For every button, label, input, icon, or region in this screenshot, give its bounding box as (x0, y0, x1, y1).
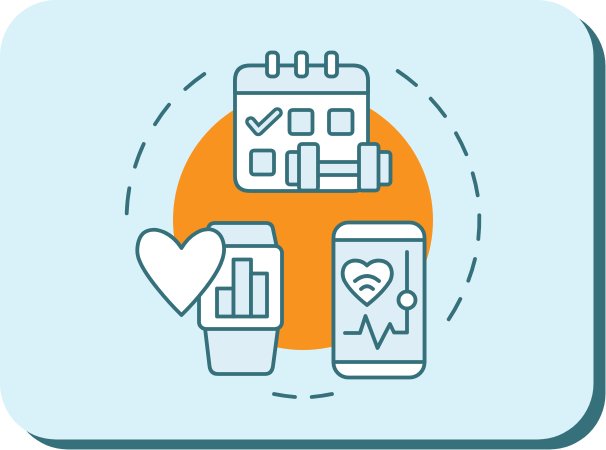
calendar header (235, 66, 368, 93)
icon: smartwatch with heart (137, 223, 282, 374)
watch top strap (204, 223, 277, 248)
slider knob (398, 292, 416, 308)
watch bottom strap (205, 328, 278, 374)
orange circle (173, 90, 433, 350)
watch body (199, 246, 282, 329)
bar chart (217, 260, 267, 316)
icon: smartphone with health app (334, 222, 424, 378)
heart with wifi arcs (343, 261, 392, 305)
icon: calendar with dumbbell (235, 52, 390, 191)
check mark (251, 113, 277, 131)
pulse line (345, 252, 407, 348)
dumbbell (287, 144, 390, 190)
dashed ring (127, 71, 479, 397)
calendar rings (267, 52, 337, 76)
calendar body (235, 66, 368, 191)
heart (137, 229, 224, 315)
calendar squares (251, 110, 352, 174)
phone body (334, 222, 424, 378)
phone screen (334, 240, 424, 362)
